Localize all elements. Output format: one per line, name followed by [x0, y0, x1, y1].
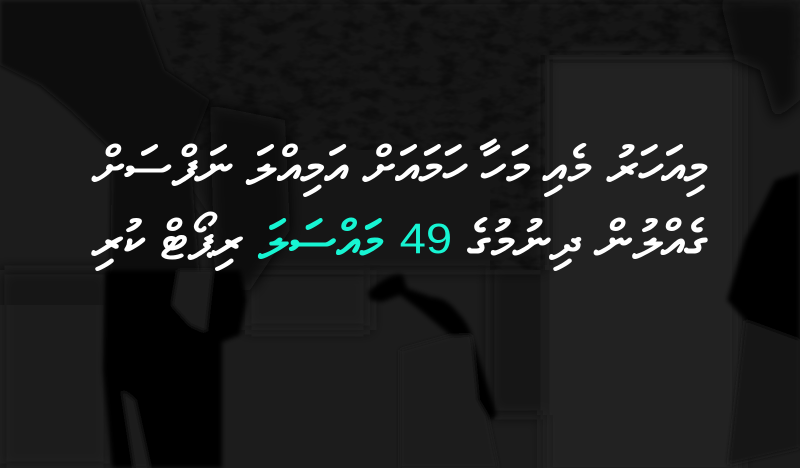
headline line 1: މިއަހަރު މެއި މަހާ ހަމައަށް އަމިއްލަ ނަފްސަށް — [92, 138, 708, 197]
foliage canopy — [0, 0, 800, 291]
headline line 2 with highlighted count: ގެއްލުން ދިނުމުގެ މައްސަލަ ރިޕޯޓް ކުރި — [92, 212, 708, 271]
right figure — [727, 172, 800, 465]
middle figure — [368, 274, 498, 468]
left figure — [103, 270, 247, 468]
headline line 2 with highlighted count: 49 — [399, 215, 452, 263]
